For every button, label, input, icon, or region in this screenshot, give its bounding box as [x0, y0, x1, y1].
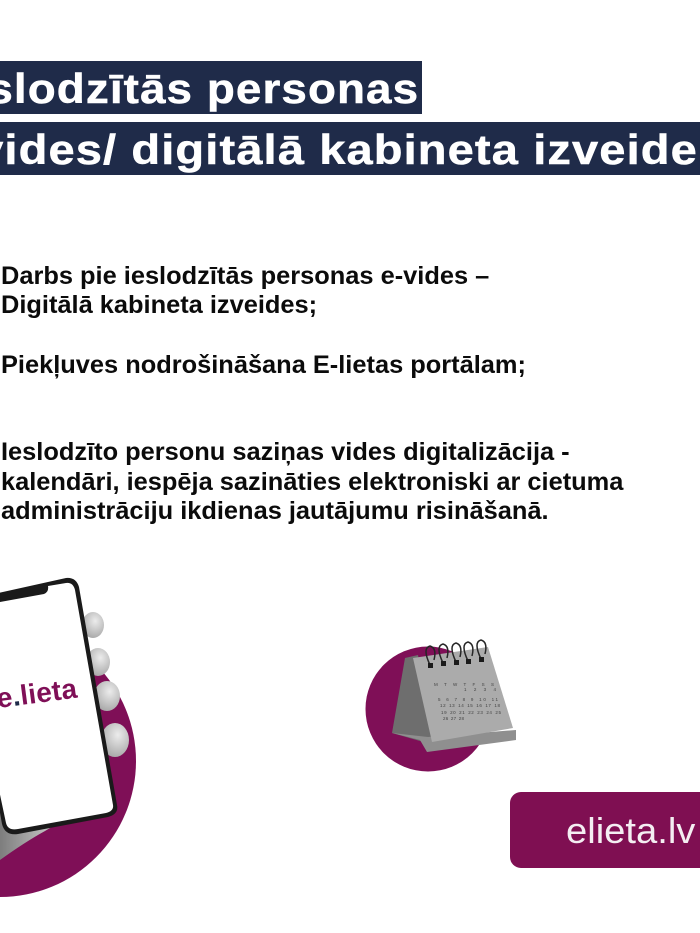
calendar dates: 26 27 28 [443, 716, 464, 721]
button: website [510, 792, 700, 868]
text block: communication: Ieslodzīto personu saziņas vides digitalizācija - [1, 438, 570, 466]
calendar rings [426, 640, 486, 665]
text block: communication: administrāciju ikdienas jautājumu risināšanā. [1, 497, 548, 525]
website label: elieta.lv [566, 810, 695, 851]
icon: desk calendar [366, 640, 516, 772]
text block: portal access: Piekļuves nodrošināšana E-lietas portālam; [1, 351, 526, 379]
calendar holes [428, 657, 484, 668]
text block: digital cabinet: Darbs pie ieslodzītās personas e-vides – [1, 262, 489, 290]
calendar dates: 12 13 14 15 16 17 18 [440, 703, 500, 708]
text block: digital cabinet [1, 262, 489, 319]
text block: communication [1, 438, 624, 525]
calendar dates: M T W T F S S [434, 682, 494, 687]
text block: communication: kalendāri, iespēja sazināties elektroniski ar cietuma [1, 468, 623, 496]
icon: hand [0, 612, 129, 860]
calendar dates: 1 2 3 4 [464, 687, 496, 692]
calendar dates: 5 6 7 8 9 10 11 [438, 697, 498, 702]
icon: phone [0, 578, 117, 834]
text block: digital cabinet: Digitālā kabineta izveides; [1, 291, 317, 319]
calendar dates [434, 682, 501, 721]
calendar dates: 19 20 21 22 23 24 25 [441, 710, 501, 715]
